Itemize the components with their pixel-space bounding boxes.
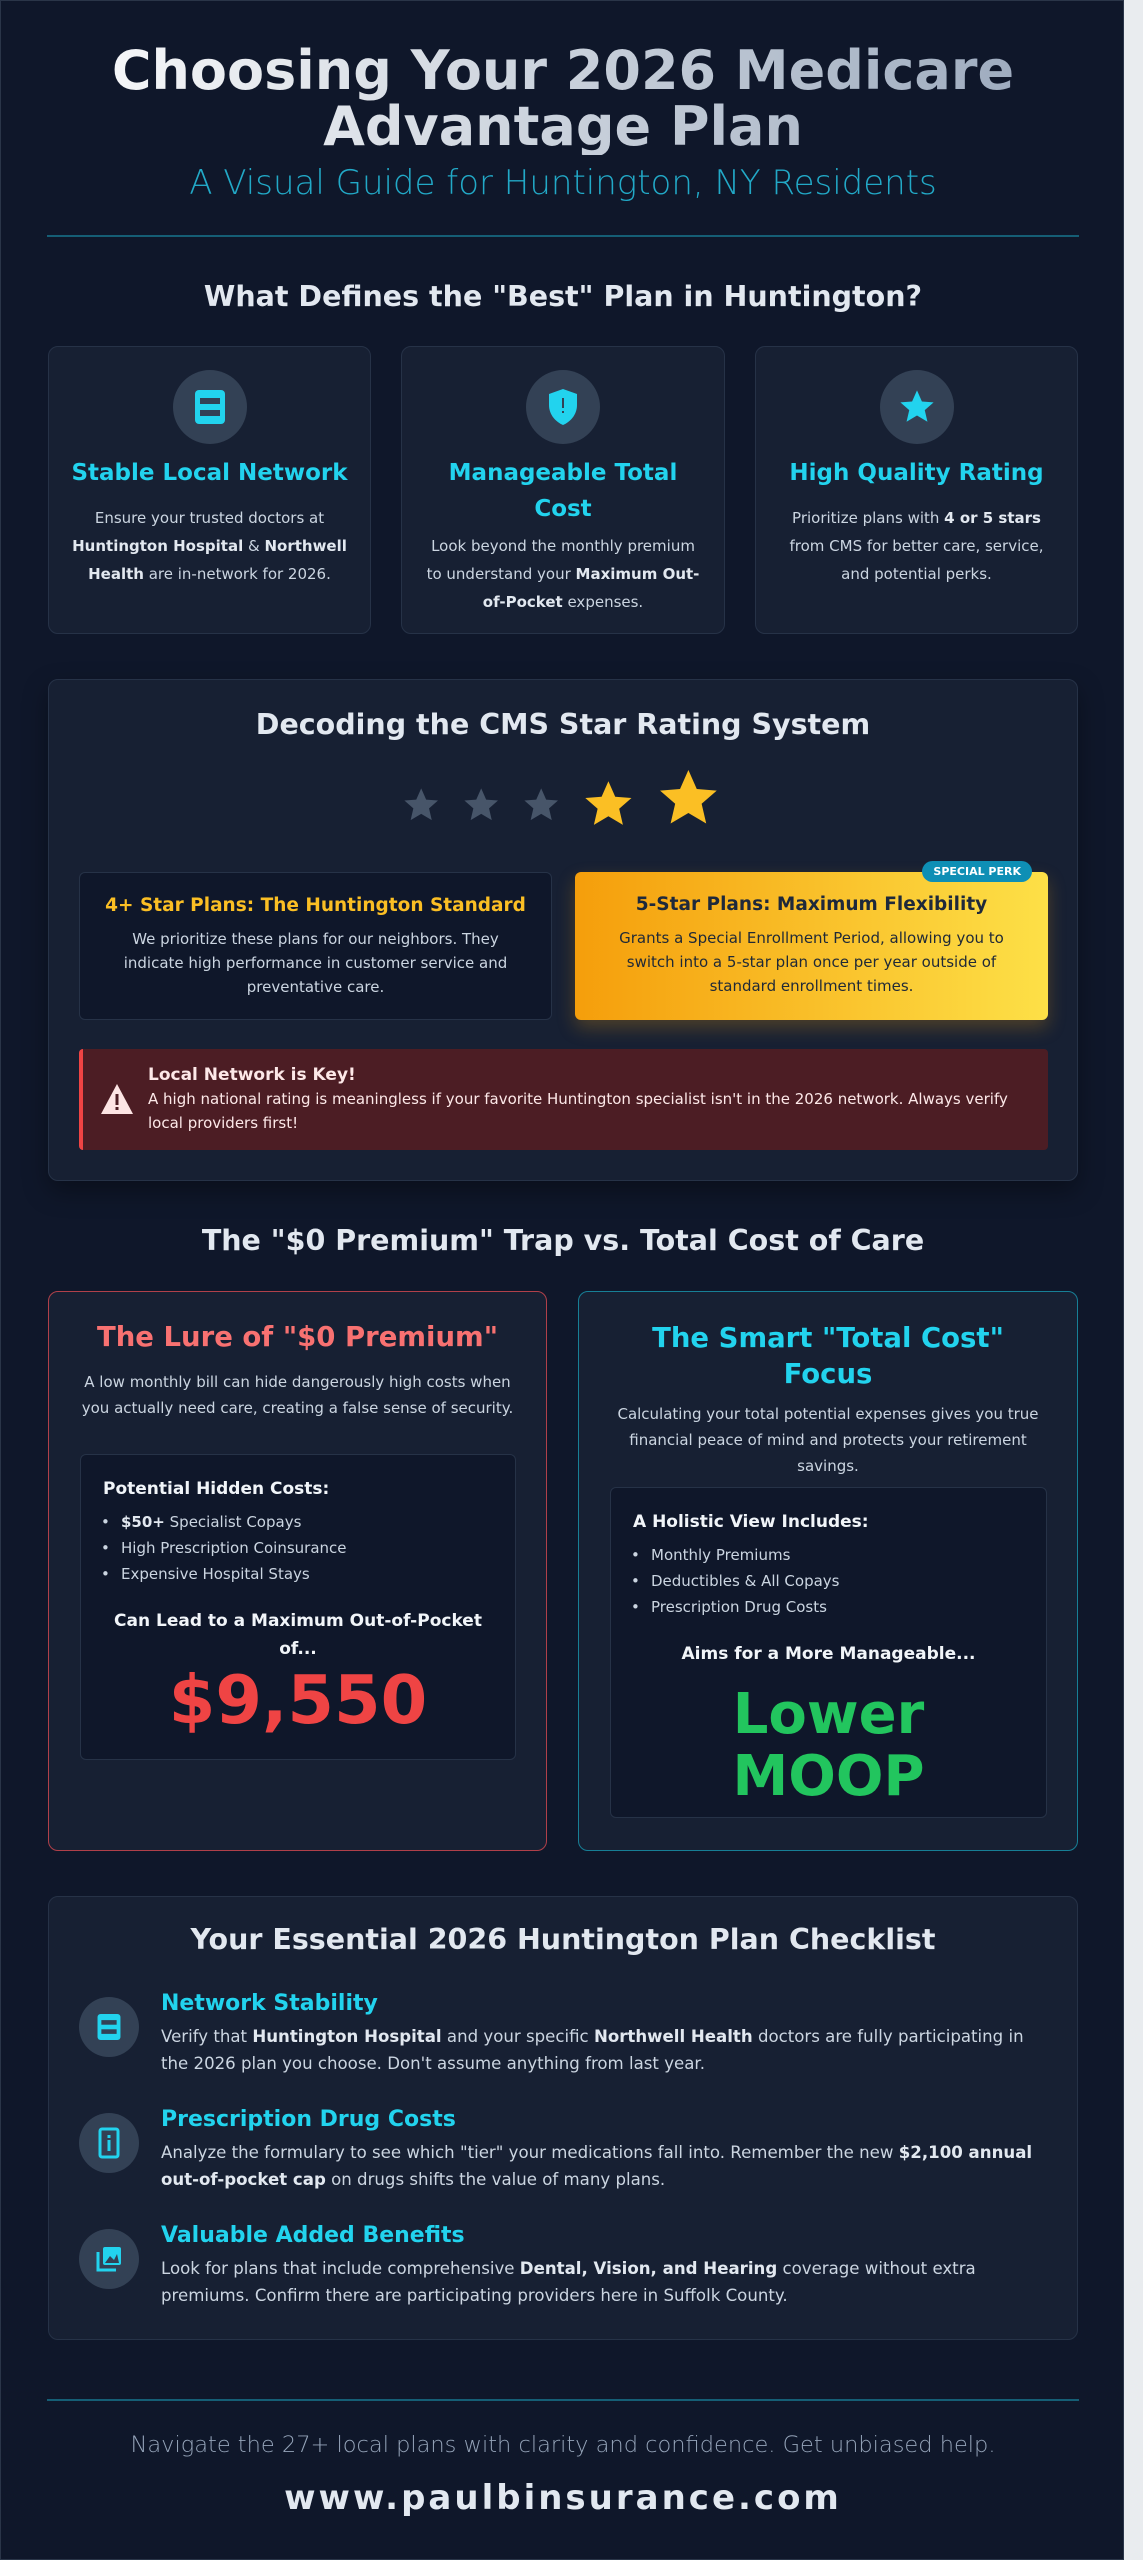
panel: lure: A low monthly bill can hide dangerously high costs when you actually need care, creating a false sense of security. bbox=[82, 1373, 513, 1417]
hidden costs box: Expensive Hospital Stays bbox=[121, 1565, 310, 1583]
panel: checklist: Your Essential 2026 Huntington Plan Checklist bbox=[190, 1923, 935, 1956]
heading: Decoding the CMS Star Rating System bbox=[256, 708, 870, 741]
item: network stability bbox=[79, 1991, 1024, 2073]
sub-card: 5 star bbox=[575, 872, 1048, 1020]
sub-card: 5 star: 5-Star Plans: Maximum Flexibility bbox=[636, 894, 987, 915]
holistic box: Deductibles & All Copays bbox=[651, 1572, 840, 1590]
footer text: Navigate the 27+ local plans with clarity and confidence. Get unbiased help. bbox=[131, 2432, 995, 2458]
card text: Ensure your trusted doctors at Huntington Hospital & Northwell Health are in-network for 2026. bbox=[72, 509, 347, 583]
item: network stability: Verify that Huntington Hospital and your specific Northwell Health doctors are fully participating in the 2026 plan you choose. Don't assume anything from last year. bbox=[161, 2027, 1024, 2073]
badge: SPECIAL PERK bbox=[933, 865, 1021, 878]
panel: smart total cost bbox=[578, 1291, 1078, 1851]
icon: warning bbox=[101, 1084, 133, 1114]
hidden costs box: Can Lead to a Maximum Out-of-Pocket of... bbox=[114, 1611, 482, 1659]
card title: Manageable Total bbox=[449, 460, 677, 486]
subtitle: A Visual Guide for Huntington, NY Residents bbox=[189, 163, 937, 203]
card: stable local network bbox=[48, 346, 371, 634]
icon: shield bbox=[526, 370, 600, 444]
item: prescription: Analyze the formulary to see which "tier" your medications fall into. Remember the new $2,100 annual out-of-pocket cap on drugs shifts the value of many plans. bbox=[161, 2143, 1032, 2189]
panel: checklist bbox=[48, 1896, 1078, 2340]
item: prescription bbox=[79, 2107, 1032, 2189]
alert bbox=[79, 1049, 1048, 1150]
hidden costs box: Potential Hidden Costs: bbox=[103, 1479, 329, 1499]
holistic box: Monthly Premiums bbox=[651, 1546, 790, 1564]
panel: lure: The Lure of "$0 Premium" bbox=[97, 1321, 498, 1353]
hidden costs box: $50+ Specialist Copays bbox=[121, 1513, 301, 1531]
item: benefits bbox=[79, 2223, 976, 2305]
item: network stability: Network Stability bbox=[161, 1991, 378, 2016]
holistic box: MOOP bbox=[732, 1744, 924, 1809]
holistic box bbox=[610, 1487, 1047, 1818]
title: Choosing Your 2026 Medicare bbox=[112, 39, 1014, 102]
alert: A high national rating is meaningless if your favorite Huntington specialist isn't in the 2026 network. Always verify local providers first! bbox=[148, 1090, 1008, 1132]
card title: High Quality Rating bbox=[789, 460, 1044, 486]
badge bbox=[922, 861, 1032, 882]
item: benefits: Valuable Added Benefits bbox=[161, 2223, 465, 2248]
stars bbox=[404, 770, 717, 825]
icon: star bbox=[880, 370, 954, 444]
card title: Cost bbox=[534, 496, 592, 522]
panel: smart total cost: Focus bbox=[784, 1358, 872, 1390]
holistic box: Aims for a More Manageable... bbox=[682, 1644, 975, 1664]
footer url: www.paulbinsurance.com bbox=[284, 2478, 842, 2518]
item: prescription: Prescription Drug Costs bbox=[161, 2107, 456, 2132]
icon: building bbox=[173, 370, 247, 444]
holistic box: Prescription Drug Costs bbox=[651, 1598, 827, 1616]
panel: smart total cost: The Smart "Total Cost" bbox=[652, 1322, 1004, 1354]
panel: lure bbox=[48, 1291, 547, 1851]
heading: what defines best: What Defines the "Best" Plan in Huntington? bbox=[204, 280, 922, 313]
card title bbox=[449, 460, 677, 522]
panel: star rating bbox=[48, 679, 1078, 1181]
item: benefits: Look for plans that include comprehensive Dental, Vision, and Hearing coverage without extra premiums. Confirm there are participating providers here in Suffolk County. bbox=[161, 2259, 976, 2305]
holistic box: Lower bbox=[733, 1682, 924, 1747]
card text: Look beyond the monthly premium to understand your Maximum Out-of-Pocket expenses. bbox=[427, 537, 699, 611]
hidden costs box: High Prescription Coinsurance bbox=[121, 1539, 346, 1557]
card text: Prioritize plans with 4 or 5 stars from CMS for better care, service, and potential perks. bbox=[790, 509, 1044, 583]
sub-card: 4+ star: 4+ Star Plans: The Huntington Standard bbox=[105, 895, 526, 916]
title: Advantage Plan bbox=[323, 95, 803, 158]
holistic box: A Holistic View Includes: bbox=[633, 1512, 869, 1532]
panel: smart total cost: Calculating your total potential expenses gives you true financial peace of mind and protects your retirement savings. bbox=[617, 1405, 1039, 1475]
sub-card: 4+ star: We prioritize these plans for our neighbors. They indicate high performance in customer service and preventative care. bbox=[124, 930, 507, 996]
card: manageable total cost bbox=[401, 346, 725, 634]
heading: premium trap: The "$0 Premium" Trap vs. Total Cost of Care bbox=[202, 1224, 924, 1257]
card title: Stable Local Network bbox=[71, 460, 348, 486]
hidden costs box bbox=[80, 1454, 516, 1760]
hidden costs box: $9,550 bbox=[169, 1661, 427, 1739]
card: high quality rating bbox=[755, 346, 1078, 634]
sub-card: 5 star: Grants a Special Enrollment Period, allowing you to switch into a 5-star plan once per year outside of standard enrollment times. bbox=[619, 929, 1004, 995]
sub-card: 4+ star bbox=[79, 872, 552, 1020]
title bbox=[1, 43, 1125, 155]
alert: Local Network is Key! bbox=[148, 1065, 356, 1085]
